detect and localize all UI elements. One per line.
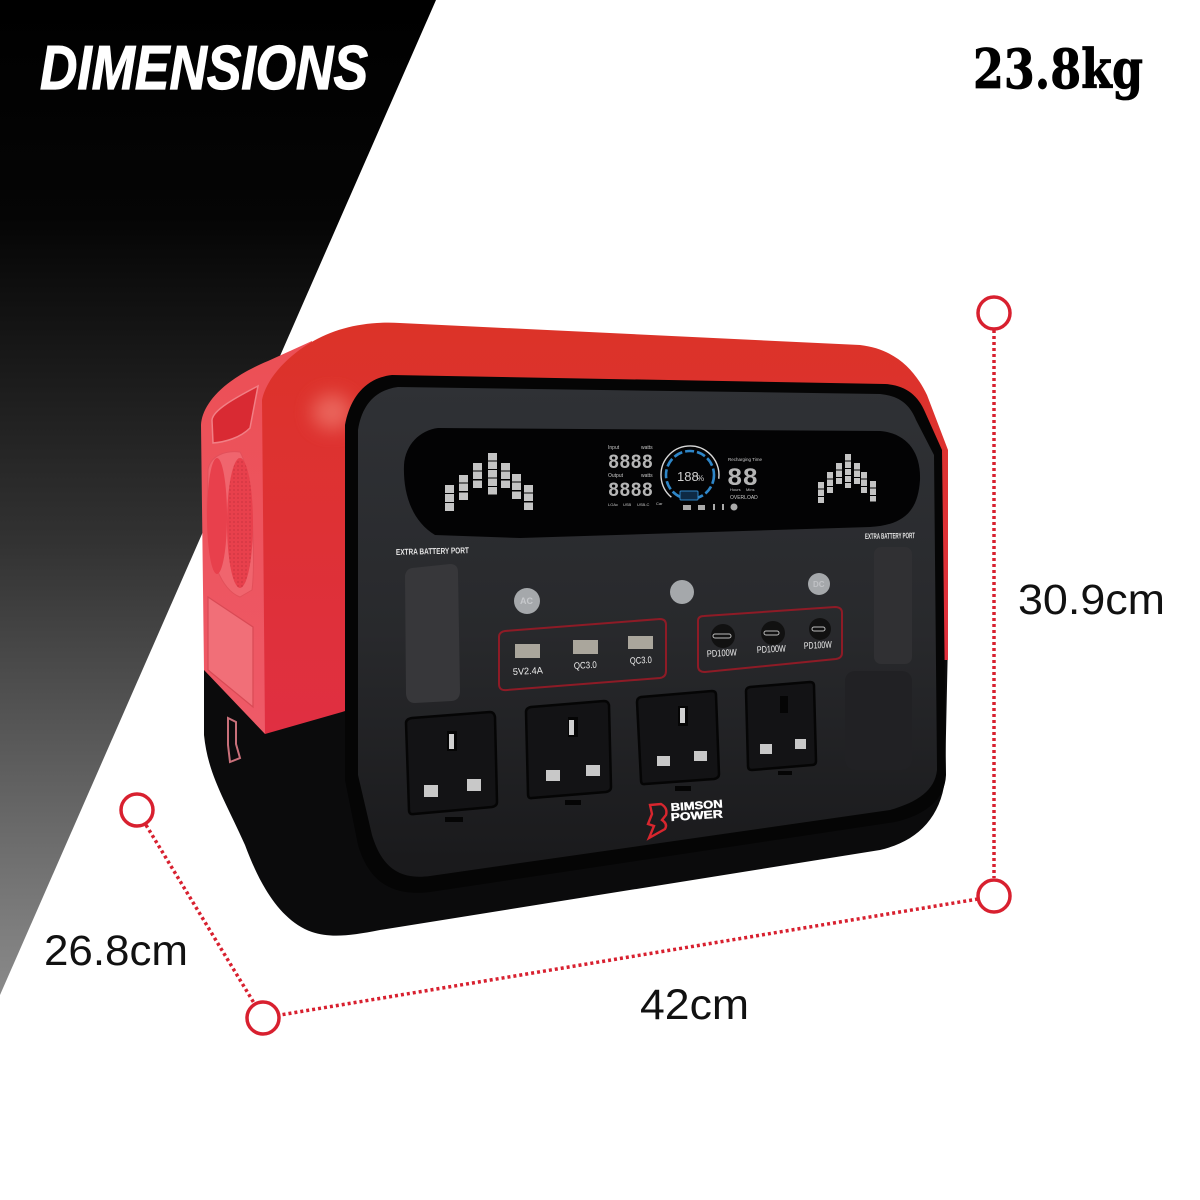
status icons: [683, 504, 738, 510]
AC button: [514, 588, 540, 614]
depth dimension: 26.8cm: [44, 927, 188, 975]
input and output readouts: 8888: [608, 452, 653, 475]
input and output readouts: USB: [623, 502, 632, 507]
USB-A group: [499, 619, 666, 690]
input and output readouts: watts: [641, 473, 653, 479]
lower black body: [204, 640, 948, 936]
brand logo: POWER: [670, 808, 723, 824]
black diagonal corner panel: [0, 0, 436, 995]
side wall red: [201, 341, 312, 734]
front red shell: [262, 323, 948, 734]
extra battery port right: [845, 531, 915, 770]
charging time readout: 88: [727, 464, 758, 493]
power button: [670, 580, 694, 604]
width dimension: [280, 880, 1010, 1029]
input and output readouts: USB-C: [637, 502, 650, 507]
height dimension: 30.9cm: [1018, 576, 1165, 624]
UK socket 2: [526, 701, 611, 805]
UK socket 1: [406, 712, 497, 822]
depth dimension: [44, 794, 279, 1034]
handle recess: [212, 386, 258, 443]
extra battery port right: EXTRA BATTERY PORT: [865, 531, 915, 541]
charging time readout: OVERLOAD: [730, 495, 758, 501]
brand logo: BIMSON: [670, 798, 723, 814]
input and output readouts: Output: [608, 473, 624, 479]
display: [404, 428, 920, 538]
USB-C group: [698, 607, 842, 672]
height dimension: [978, 297, 1165, 878]
AC button: AC: [520, 596, 533, 606]
display glass: [404, 428, 920, 538]
USB-C group: PD100W: [804, 640, 832, 652]
input and output readouts: 8888: [608, 480, 653, 503]
USB-A group: 5V2.4A: [513, 665, 544, 678]
input and output readouts: LOAc: [608, 502, 618, 507]
charging time readout: Recharging Time: [728, 457, 763, 462]
title: DIMENSIONS: [40, 34, 368, 103]
USB-C group: PD100W: [757, 643, 786, 656]
extra battery port left: [396, 545, 470, 703]
UK socket 3: [637, 691, 719, 791]
USB-C group: PD100W: [707, 647, 737, 660]
UK socket 4: [746, 682, 816, 775]
DC button: DC: [813, 580, 825, 589]
input and output readouts: Car: [656, 501, 663, 506]
left level bars: [445, 453, 533, 511]
right level bars: [818, 454, 876, 503]
extra battery port left: EXTRA BATTERY PORT: [396, 545, 470, 557]
charging time readout: Mins: [746, 487, 754, 492]
input and output readouts: Input: [608, 445, 620, 451]
brand logo: [648, 798, 723, 838]
DC button: [808, 573, 830, 595]
power station product: [201, 323, 948, 936]
USB-A group: QC3.0: [574, 660, 597, 672]
battery gauge: %: [697, 474, 704, 483]
battery gauge: [649, 434, 731, 516]
shell highlight: [312, 394, 352, 430]
battery gauge: 188: [677, 469, 699, 484]
charging time readout: Hours: [730, 487, 741, 492]
side logo mark: [228, 718, 240, 762]
front plate: [358, 387, 937, 877]
input and output readouts: watts: [641, 445, 653, 451]
USB-A group: QC3.0: [630, 655, 652, 667]
side label panel: [208, 597, 253, 707]
input and output readouts: [608, 445, 663, 507]
charging time readout: [727, 457, 763, 501]
width dimension: 42cm: [640, 981, 749, 1029]
side vent: [207, 452, 254, 597]
weight: 23.8kg: [973, 37, 1143, 101]
front plate outer rim: [345, 375, 946, 893]
